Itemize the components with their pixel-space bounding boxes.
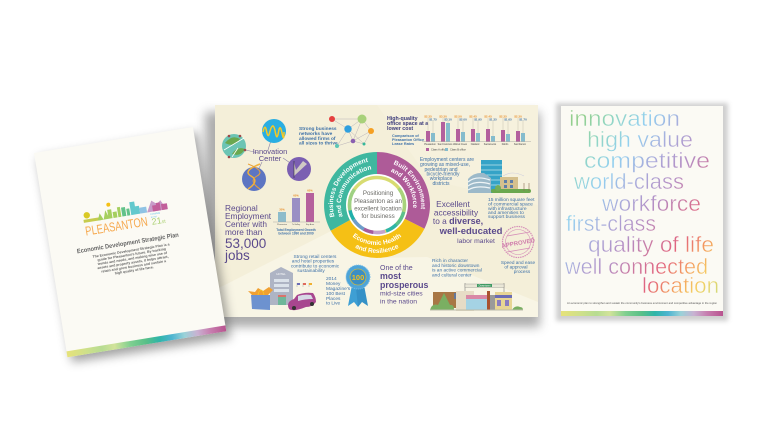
wheel centre text: for business [361, 213, 395, 220]
text: one of the most prosperous: in the nation [380, 298, 417, 306]
text: regional employment center: 53,000 [225, 236, 266, 251]
bar chart: total employment growth: 60% [293, 194, 299, 198]
logo: 21st: 21st [151, 215, 167, 227]
bar chart: office lease rates: $2.30 [514, 114, 522, 118]
bar chart: office lease rates: $3.10 [444, 118, 452, 122]
wheel curved labels: and Workforce [391, 168, 417, 208]
text: rich in character [432, 258, 482, 278]
bar chart: total employment growth: Pleasanton [277, 223, 287, 226]
wheel centre text [354, 190, 402, 220]
text: high-quality office space: office space at a [387, 121, 428, 127]
wheel segment: economic health and resilience [331, 218, 424, 258]
wheel curved labels: Economic Health [352, 233, 402, 246]
text: regional employment center: Employment [225, 211, 272, 221]
text: cover body [92, 242, 173, 279]
text: speed and ease: of approval [504, 264, 528, 270]
illustration: hotel, shopping bag and car: HOTEL [276, 272, 286, 276]
diagram: positioning wheel [324, 152, 430, 258]
text: strong retail centers: and hotel properties [292, 258, 335, 264]
text: high-quality office space: lower cost [387, 126, 413, 132]
illustration: hotel, shopping bag and car [248, 267, 316, 310]
text: rich in character: and historic downtown [432, 263, 480, 269]
text: cover body: guide for Pleasanton's future. By tracking [97, 247, 166, 262]
wheel curved labels: Business Development [328, 158, 368, 218]
text: speed and ease [501, 260, 535, 274]
text: speed and ease: Speed and ease [501, 260, 535, 265]
bar chart: office lease rates: $1.65 [504, 118, 512, 122]
colour stripe [561, 311, 723, 316]
icon: top 100 ribbon [346, 265, 370, 307]
logo: pleasanton skyline [81, 193, 170, 239]
text: cover body: assets and property assets, it helps attract, [97, 255, 169, 270]
text: rich in character: and cultural center [432, 272, 472, 278]
bar chart: office lease rates: Pleasanton [424, 143, 436, 146]
keyword cloud: workforce [601, 191, 701, 216]
text: strong business networks: networks have [299, 131, 333, 137]
heading: innovation center [253, 147, 287, 163]
bar chart: office lease rates: $1.95 [474, 118, 482, 122]
keyword cloud: world-class [573, 169, 684, 194]
illustration: downtown main street [430, 283, 523, 311]
bar chart: total employment growth: Bay Area [306, 223, 315, 226]
wheel curved labels: and Communication [336, 166, 372, 217]
wheel curved labels: and Resilience [355, 245, 398, 253]
text: strong business networks: Strong business [299, 126, 337, 132]
text: comparison of lease rates: Comparison of [392, 134, 420, 138]
text: employment centers: growing as mixed-use, [420, 162, 470, 168]
bar chart: total employment growth: 60% [307, 188, 313, 192]
text: employment centers [420, 157, 474, 187]
text: one of the most prosperous: mid-size cities [380, 290, 423, 298]
panel: right keywords page [561, 106, 723, 316]
bar chart: office lease rates: San Ramon [514, 144, 527, 146]
logo wordmark: PLEASANTON [84, 214, 149, 239]
footnote: An economic plan to strengthen and sustain the community's business environment and competitive advantage in the region [567, 301, 718, 305]
text: strong retail centers [291, 254, 340, 274]
icon: approved stamp: APPROVED [501, 238, 536, 250]
text: strong retail centers: contribute to economic [291, 264, 340, 270]
text: commercial space: with infrastructure [488, 206, 527, 212]
keyword cloud [564, 106, 719, 298]
keyword cloud: competitive [584, 148, 710, 173]
text: strong business networks: allowed firms of [299, 136, 336, 142]
bar chart: office lease rates: $1.75 [429, 118, 437, 122]
text: money magazine: Money [326, 281, 341, 287]
bar chart: office lease rates: $1.35 [489, 118, 497, 122]
icon: top 100 ribbon: 100 [352, 273, 364, 282]
text: excellent accessibility: Excellent [436, 199, 471, 209]
text: strong retail centers: Strong retail centers [294, 254, 337, 260]
text: employment centers: bicycle-friendly [426, 172, 460, 178]
wheel segment: built environment and workforce [377, 152, 430, 229]
text: commercial space: and amenities to [488, 210, 524, 216]
bar chart: total employment growth: 30% [279, 208, 285, 212]
text: regional employment center: Regional [225, 203, 258, 213]
text: money magazine [326, 276, 351, 306]
text: cover body: high quality of life here. [115, 265, 154, 275]
text: regional employment center: jobs [224, 248, 250, 263]
wheel centre circle [346, 174, 408, 236]
heading: innovation center: Center [259, 154, 282, 163]
text: rich in character: is an active commercial [432, 268, 482, 274]
illustration: downtown main street: Downtown [479, 285, 491, 288]
keyword cloud: high value [587, 127, 693, 152]
text: strong retail centers: sustainability [297, 268, 325, 274]
text: high-quality office space [387, 116, 428, 132]
colour stripe [66, 325, 226, 357]
icon: innovation center cluster [222, 119, 311, 191]
keyword cloud: innovation [569, 106, 680, 131]
bar chart: office lease rates: Class A office [431, 148, 447, 152]
bar chart: office lease rates: Oakland [471, 144, 480, 146]
text: excellent accessibility: to a diverse, [433, 216, 483, 226]
text: money magazine: 100 Best [326, 291, 346, 297]
bar chart: office lease rates: $1.70 [519, 118, 527, 122]
bar chart: total employment growth: Tri-Valley [292, 224, 300, 226]
text: money magazine: Places [326, 296, 341, 302]
text: rich in character: Rich in character [432, 258, 468, 264]
keyword cloud: well connected [564, 254, 708, 279]
text: speed and ease: process [514, 269, 531, 274]
text: one of the most prosperous: One of the [380, 265, 413, 272]
text: comparison of lease rates: Pleasanton Office [392, 138, 424, 142]
text: high-quality office space: High-quality [387, 116, 418, 122]
text: money magazine: Magazine's [326, 286, 351, 292]
logo tagline [150, 211, 161, 219]
bar chart: office lease rates: $3.30 [439, 114, 447, 118]
text: money magazine: 2014 [326, 276, 337, 282]
text: commercial space: 15 million square feet [488, 197, 535, 203]
text: strong business networks: all sizes to thrive [299, 140, 338, 146]
bar chart: office lease rates: $2.45 [469, 114, 477, 118]
bar chart: total employment growth [273, 188, 320, 236]
bar chart: office lease rates: Walnut Creek [453, 143, 468, 146]
bar chart: total employment growth: Total Employment Growth [276, 228, 316, 232]
text: commercial space: support business [488, 214, 526, 220]
bar chart: office lease rates: $2.35 [499, 114, 507, 118]
logo tagline: Investing [150, 211, 161, 216]
icon: approved stamp [501, 226, 536, 258]
bar chart: office lease rates: San Francisco [438, 143, 453, 146]
text: commercial space [488, 197, 535, 220]
text: excellent accessibility: labor market [457, 238, 495, 245]
text: employment centers: districts [433, 181, 450, 187]
bar chart: office lease rates: $2.50 [454, 114, 462, 118]
text: comparison of lease rates: Lease Rates [392, 142, 414, 146]
text: regional employment center [224, 203, 272, 263]
text: one of the most prosperous [380, 265, 428, 306]
heading: economic development strategic plan: Economic Development Strategic Plan [76, 232, 179, 255]
bar chart: office lease rates: Sacramento [484, 143, 497, 146]
wheel segment: business development and communication [324, 152, 377, 231]
text: one of the most prosperous: prosperous [380, 280, 428, 290]
bar chart: office lease rates: Dublin [502, 144, 509, 146]
wheel colored ring [350, 178, 404, 232]
logo tagline: in our [151, 215, 157, 219]
text: strong business networks [299, 126, 338, 146]
text: excellent accessibility [433, 199, 503, 245]
text: excellent accessibility: well-educated [439, 226, 503, 237]
icon: business network diagram [329, 114, 374, 148]
wheel curved labels [328, 158, 426, 253]
bar chart: total employment growth: between 1990 and 2009 [278, 232, 314, 236]
text: comparison of lease rates [392, 134, 424, 146]
text: regional employment center: more than [225, 227, 263, 237]
bar chart: office lease rates: $2.45 [484, 114, 492, 118]
bar chart: office lease rates [422, 114, 531, 152]
wheel centre text: excellent location [354, 206, 402, 212]
text: employment centers: pedestrian and [424, 167, 458, 173]
bar chart: office lease rates: $2.00 [459, 118, 467, 122]
keyword cloud: first-class [566, 211, 656, 236]
keyword cloud: location [642, 273, 719, 298]
bar chart: office lease rates: Class B office [450, 148, 466, 152]
text: cover body: The Economic Development Strategic Plan is a [92, 242, 170, 259]
text: regional employment center: Center with [225, 219, 267, 229]
text: cover body: retain and grow business and sustain a [101, 259, 166, 274]
wheel centre text: Pleasanton as an [354, 198, 402, 205]
illustration: mixed-use buildings [468, 160, 531, 193]
text: employment centers: Employment centers are [420, 157, 474, 163]
text: money magazine: to Live [326, 300, 340, 306]
bar chart: office lease rates: $2.35 [424, 114, 432, 118]
wheel curved labels: Built Environment [394, 160, 426, 210]
panel: left cover page [34, 127, 226, 357]
text: employment centers: workplace [430, 176, 452, 182]
heading: innovation center: Innovation [253, 147, 287, 156]
text: cover body: trends and needs, and making wise use of [97, 251, 168, 266]
wheel centre text: Positioning [363, 190, 394, 197]
keyword cloud: quality of life [588, 232, 714, 257]
text: commercial space: of commercial space [488, 202, 533, 208]
text: excellent accessibility: accessibility [434, 208, 479, 218]
panel: central infographic background [215, 105, 538, 317]
text: one of the most prosperous: most [380, 271, 401, 281]
